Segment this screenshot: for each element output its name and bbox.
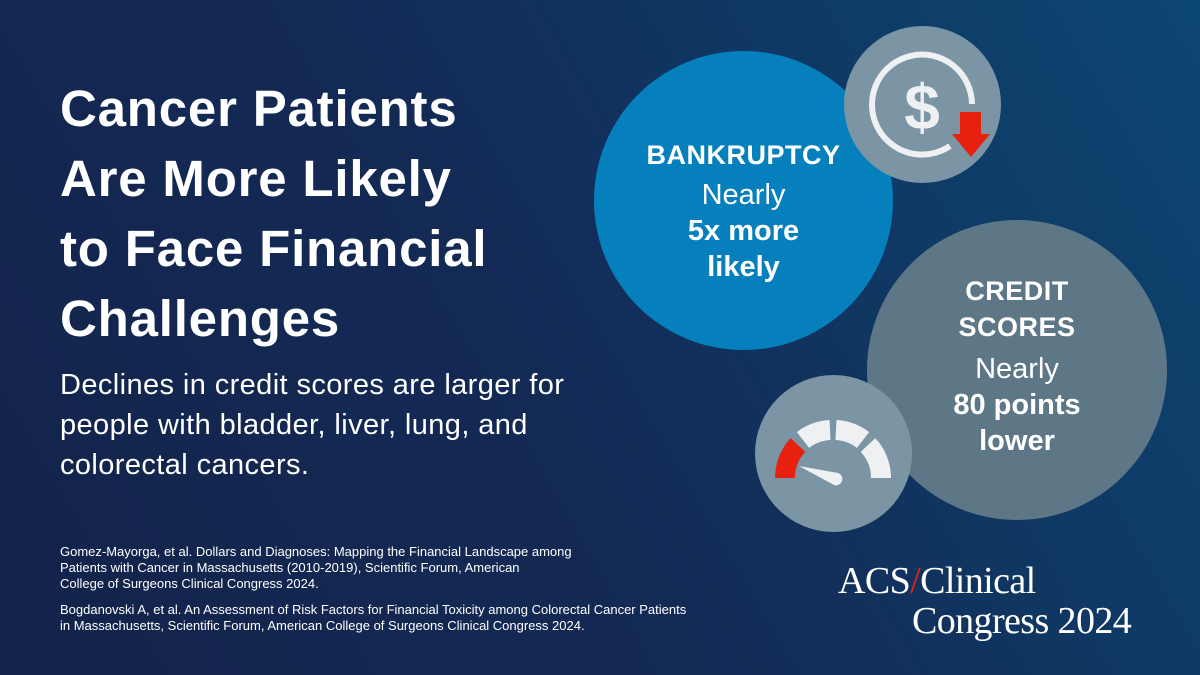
title: Cancer Patients <box>60 80 458 137</box>
panel: credit scores circle <box>867 220 1167 520</box>
logo: ACS/Clinical <box>838 560 1036 602</box>
panel: bankruptcy circle: BANKRUPTCY <box>646 140 840 170</box>
panel: credit scores circle: SCORES <box>958 312 1076 342</box>
panel: bankruptcy circle: 5x more <box>688 215 799 247</box>
subtitle text: Declines in credit scores are larger for people with bladder, liver, lung, and colorectal cancers. <box>60 369 564 481</box>
citations: Bogdanovski A, et al. An Assessment of Risk Factors for Financial Toxicity among Colorectal Cancer Patients <box>60 602 686 617</box>
icon: gauge <box>755 375 912 532</box>
citations: College of Surgeons Clinical Congress 2024. <box>60 576 319 591</box>
icon: dollar down: $ <box>904 71 940 143</box>
logo <box>838 560 1132 642</box>
title: to Face Financial <box>60 220 487 277</box>
panel: credit scores circle: Nearly <box>975 353 1059 385</box>
logo: Congress 2024 <box>912 600 1131 642</box>
panel: bankruptcy circle <box>594 51 893 350</box>
title: Challenges <box>60 290 340 347</box>
citations <box>60 544 686 633</box>
panel: credit scores circle: 80 points <box>953 389 1081 421</box>
citations: Patients with Cancer in Massachusetts (2010-2019), Scientific Forum, American <box>60 560 520 575</box>
citations: Gomez-Mayorga, et al. Dollars and Diagnoses: Mapping the Financial Landscape among <box>60 544 572 559</box>
panel: credit scores circle: lower <box>979 425 1055 457</box>
icon: dollar down <box>844 26 1001 183</box>
citations: in Massachusetts, Scientific Forum, American College of Surgeons Clinical Congress 2024. <box>60 618 585 633</box>
panel: credit scores circle: CREDIT <box>965 276 1069 306</box>
panel: bankruptcy circle: Nearly <box>702 179 785 211</box>
panel: bankruptcy circle: likely <box>707 251 780 283</box>
title: Are More Likely <box>60 150 452 207</box>
title <box>60 80 487 347</box>
